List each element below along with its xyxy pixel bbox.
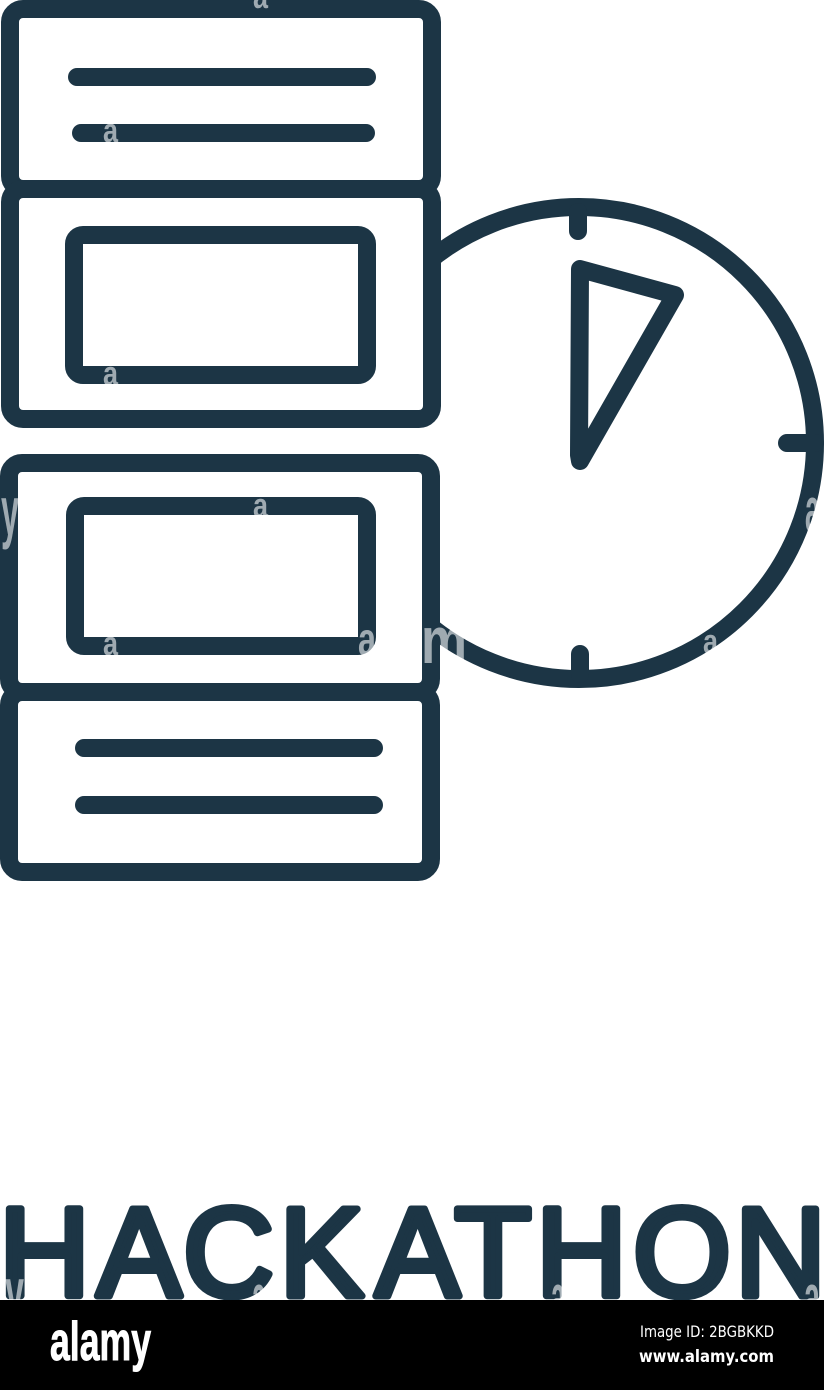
image placeholder [75,506,367,646]
footer logo: alamy [50,1310,151,1372]
watermark fragments: a [103,112,119,150]
website: www.alamy.com [639,1347,774,1367]
watermark fragments: a [551,1263,565,1332]
watermark fragments: a [252,1263,266,1332]
watermark fragments: a [703,623,719,661]
clock wedge hand [579,269,675,461]
watermark fragments: a [103,625,119,663]
panel: bottom text card [9,692,431,872]
icon: hackathon schedule and clock [9,9,815,872]
panel: top image card [10,189,432,419]
watermark fragments: y [1,472,19,550]
watermark fragments: m [421,603,467,677]
clock tick marks [578,212,815,674]
title: HACKATHON [0,1182,824,1323]
clock face [440,198,824,688]
panel: top text card [10,9,432,189]
watermark fragments: y [5,1253,24,1331]
icon: clock [440,198,824,688]
footer bar [0,1300,824,1390]
panel: lower image card [9,463,431,692]
image placeholder [74,235,367,375]
text lines [77,77,367,133]
image id: Image ID: 2BGBKKD [640,1322,774,1341]
watermark fragments: a [358,613,376,665]
watermark fragments: a [103,355,119,393]
text lines [84,748,374,805]
watermark fragments: a [253,487,269,525]
